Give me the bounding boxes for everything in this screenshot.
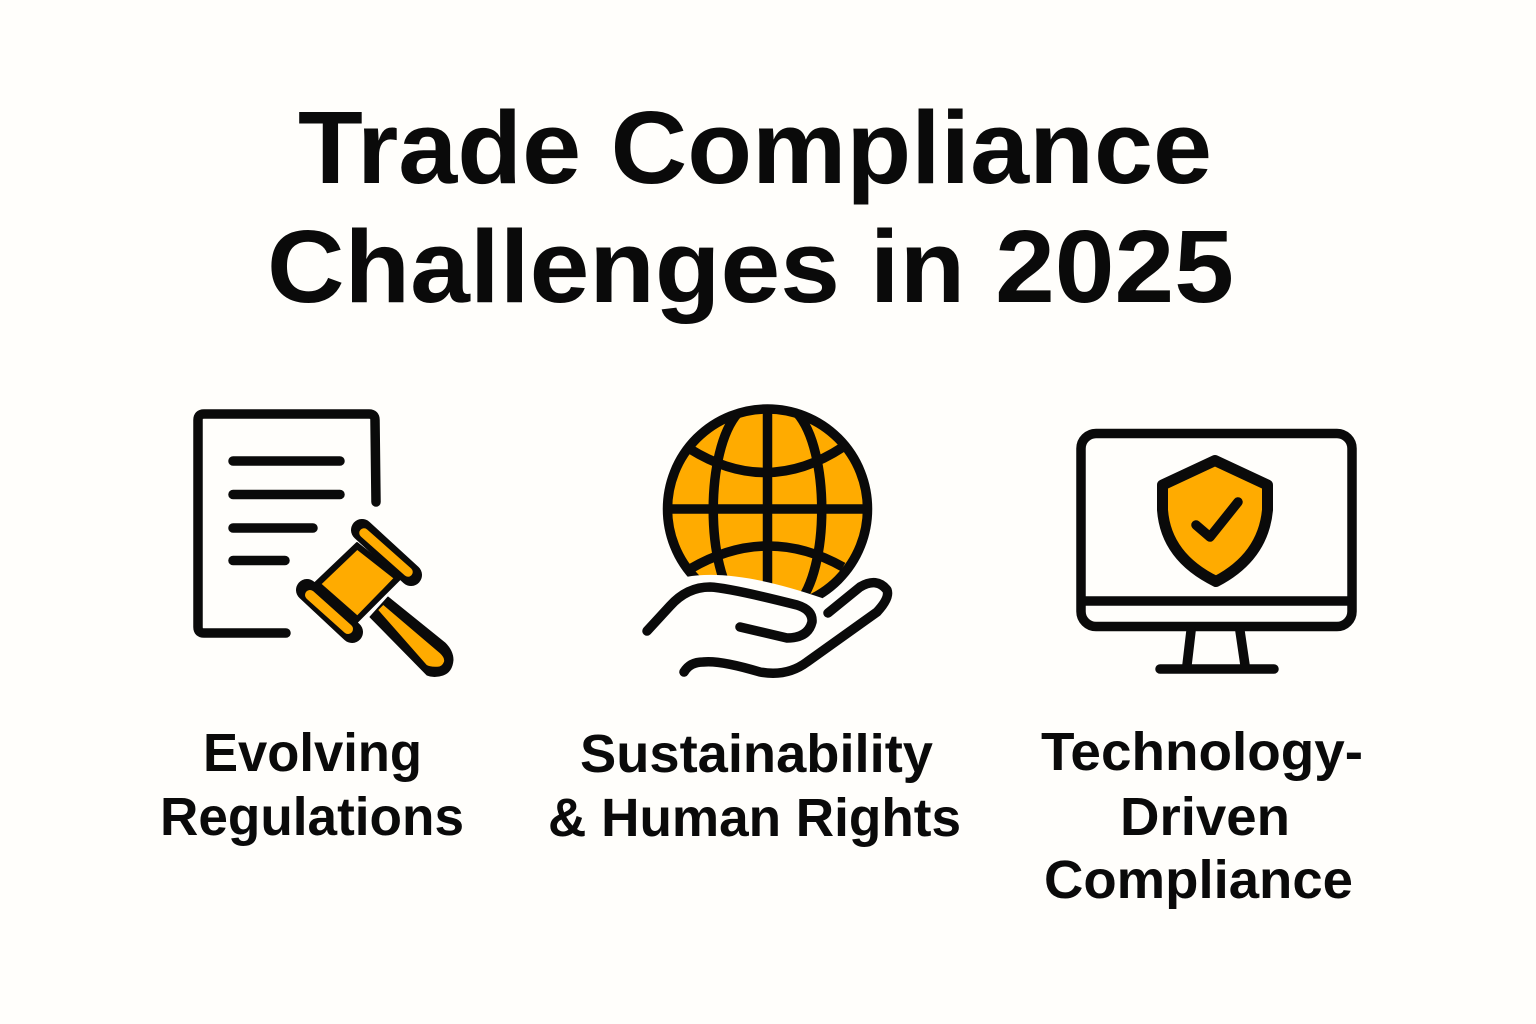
title (267, 90, 1234, 324)
label: technology-driven compliance: Driven (1120, 788, 1290, 847)
icon: globe in hand (647, 409, 888, 673)
label: evolving regulations (160, 724, 464, 847)
panel: technology-driven compliance (1041, 434, 1363, 910)
document outline (198, 414, 376, 633)
hand cutout (686, 575, 870, 650)
label: technology-driven compliance (1041, 723, 1363, 910)
globe (668, 409, 868, 609)
shield (1162, 460, 1268, 582)
monitor stand (1160, 631, 1274, 669)
monitor screen (1081, 434, 1352, 626)
panel: evolving regulations (160, 414, 464, 847)
gavel handle (370, 597, 453, 676)
icon: document with gavel (198, 414, 453, 676)
label: technology-driven compliance: Compliance (1044, 851, 1353, 910)
hand palm and thumb (647, 587, 812, 638)
monitor divider (1081, 596, 1352, 606)
document text lines (233, 461, 340, 560)
hand fingers and wrist (684, 583, 888, 673)
icon: monitor with shield (1081, 434, 1352, 669)
title: Challenges in 2025 (267, 209, 1234, 324)
label: sustainability and human rights (548, 725, 961, 848)
label: technology-driven compliance: Technology- (1041, 723, 1363, 782)
gavel head (307, 530, 411, 632)
label: sustainability and human rights: Sustainability (580, 725, 933, 784)
label: sustainability and human rights: & Human Rights (548, 789, 961, 848)
panel: sustainability and human rights (548, 409, 961, 848)
title: Trade Compliance (298, 90, 1212, 205)
label: evolving regulations: Evolving (203, 724, 422, 783)
label: evolving regulations: Regulations (160, 788, 464, 847)
checkmark (1196, 502, 1238, 537)
